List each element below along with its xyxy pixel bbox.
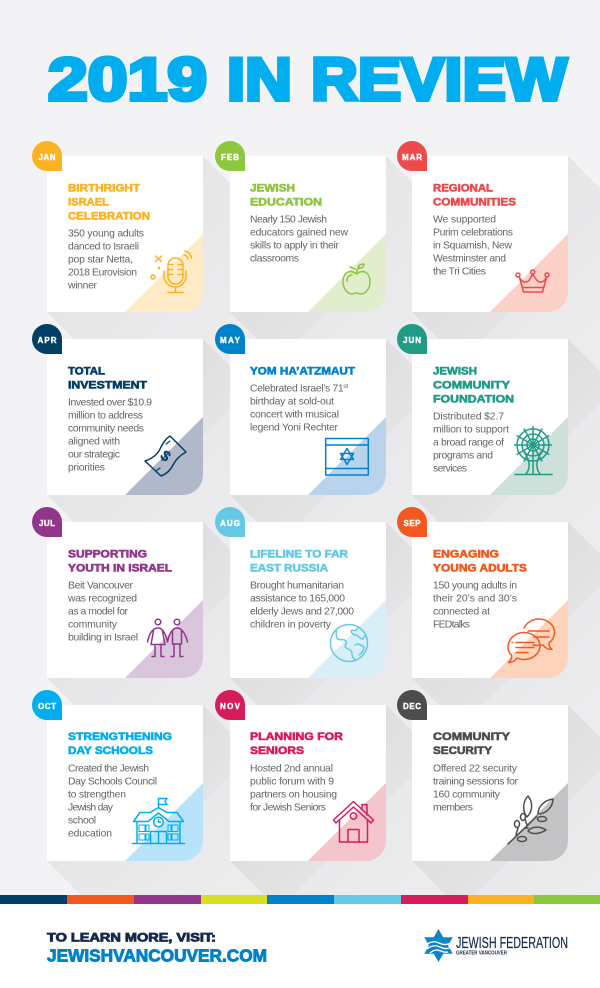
- body text: Day Schools Council: [68, 776, 157, 787]
- colour band: [0, 895, 600, 904]
- body text: winner: [67, 281, 98, 292]
- body text: our strategic: [68, 450, 120, 461]
- icon: Israeli flag: [326, 438, 368, 475]
- body text: Offered 22 security: [433, 763, 518, 774]
- badge: MAY: MAY: [220, 336, 241, 345]
- heading: JEWISH: [433, 365, 477, 377]
- body text: education: [68, 828, 112, 839]
- badge: SEP: [397, 507, 427, 537]
- heading: CELEBRATION: [68, 210, 150, 222]
- logo: Jewish Federation: [424, 929, 568, 962]
- badge: MAR: MAR: [402, 153, 422, 162]
- title: 2019: [48, 46, 207, 113]
- panel: February: [215, 141, 386, 312]
- heading: FOUNDATION: [433, 393, 514, 405]
- icon: microphone: [151, 251, 192, 292]
- badge: APR: [32, 324, 62, 354]
- panel: October: [32, 690, 203, 861]
- badge: DEC: [397, 690, 427, 720]
- icon: speech bubbles: [508, 619, 554, 662]
- badge: JAN: [32, 141, 62, 171]
- heading: COMMUNITY: [433, 379, 511, 391]
- badge: JAN: JAN: [38, 153, 56, 162]
- body text: [433, 580, 517, 630]
- body text: Purim celebrations: [433, 228, 513, 239]
- call to action: JEWISHVANCOUVER.COM: [47, 946, 267, 966]
- badge: FEB: FEB: [221, 153, 239, 162]
- badge: SEP: SEP: [404, 519, 421, 528]
- heading: COMMUNITY: [433, 731, 511, 743]
- icon: apple: [343, 264, 370, 294]
- heading: [250, 182, 322, 208]
- icon: globe: [330, 624, 368, 662]
- body text: [250, 763, 337, 813]
- call to action: [47, 930, 267, 966]
- panel: June: [397, 324, 568, 495]
- body text: 2018 Eurovision: [68, 268, 137, 279]
- body text: programs and: [433, 451, 493, 462]
- heading: [433, 182, 516, 208]
- heading: SENIORS: [250, 745, 304, 757]
- heading: INVESTMENT: [68, 379, 147, 391]
- body text: pop star Netta,: [68, 255, 133, 266]
- body text: million to address: [68, 411, 143, 422]
- body text: We supported: [433, 215, 496, 226]
- icon: olive branch: [508, 796, 553, 844]
- icon: banknote: $: [157, 447, 174, 466]
- body text: birthday at sold-out: [250, 397, 334, 408]
- panel: March: [397, 141, 568, 312]
- heading: JEWISH: [250, 182, 295, 194]
- heading: DAY SCHOOLS: [68, 745, 153, 757]
- call to action: TO LEARN MORE, VISIT:: [47, 930, 216, 944]
- body text: Jewish day: [68, 802, 114, 813]
- body text: 350 young adults: [68, 229, 144, 240]
- heading: SUPPORTING: [68, 548, 147, 560]
- body text: public forum with 9: [250, 776, 334, 787]
- body text: members: [433, 802, 473, 813]
- long card shadows: [47, 156, 600, 988]
- badge: NOV: NOV: [220, 702, 241, 711]
- body text: concert with musical: [250, 410, 339, 421]
- body text: Created the Jewish: [68, 763, 149, 774]
- badge: JUL: [32, 507, 62, 537]
- panel: May: [215, 324, 386, 495]
- heading: [433, 548, 527, 574]
- heading: [250, 548, 348, 574]
- panel: September: [397, 507, 568, 678]
- heading: EAST RUSSIA: [250, 562, 328, 574]
- icon: house: [334, 802, 374, 842]
- icon: school building: [132, 798, 184, 844]
- heading: [433, 365, 514, 405]
- body text: danced to Israeli: [68, 242, 139, 253]
- badge: DEC: DEC: [403, 702, 421, 711]
- body text: was recognized: [67, 593, 137, 604]
- body text: 160 community: [433, 789, 501, 800]
- body text: training sessions for: [433, 776, 519, 787]
- panel: December: [397, 690, 568, 861]
- body text: Celebrated Israel’s 71: [250, 384, 344, 395]
- body text: in Squamish, New: [433, 241, 512, 252]
- heading: LIFELINE TO FAR: [250, 548, 348, 560]
- body text: FEDtalks: [433, 619, 470, 630]
- body text: as a model for: [68, 606, 129, 617]
- badge: APR: APR: [38, 336, 57, 345]
- panel: August: [215, 507, 386, 678]
- panel: July: [32, 507, 203, 678]
- body text: their 20’s and 30’s: [433, 593, 517, 604]
- body text: children in poverty: [250, 619, 332, 630]
- body text: a broad range of: [433, 438, 504, 449]
- heading: STRENGTHENING: [68, 731, 172, 743]
- badge: AUG: AUG: [220, 519, 240, 528]
- body text: partners on housing: [250, 789, 337, 800]
- body text: elderly Jews and 27,000: [250, 606, 354, 617]
- body text: [67, 229, 144, 292]
- heading: [68, 731, 172, 757]
- heading: YOUNG ADULTS: [433, 562, 527, 574]
- body text: services: [433, 464, 467, 475]
- body text: community: [68, 619, 118, 630]
- body text: Distributed $2.7: [433, 412, 504, 423]
- body text: million to support: [433, 425, 509, 436]
- badge: MAR: [397, 141, 427, 171]
- body text: [433, 412, 509, 475]
- icon: banknote: [145, 436, 186, 476]
- heading: SECURITY: [433, 745, 493, 757]
- body text: community needs: [68, 424, 144, 435]
- heading: [68, 182, 150, 222]
- icon: two children: [148, 619, 188, 656]
- body text: the Tri Cities: [433, 267, 486, 278]
- badge: FEB: [215, 141, 245, 171]
- body text: [68, 398, 152, 474]
- heading: TOTAL: [68, 365, 105, 377]
- panel: April: [32, 324, 203, 495]
- heading: [68, 365, 147, 391]
- panel: January: [32, 141, 203, 312]
- icon: tree: [513, 425, 553, 474]
- body text: aligned with: [68, 437, 120, 448]
- body text: [250, 215, 348, 265]
- badge: AUG: [215, 507, 245, 537]
- body text: Beit Vancouver: [68, 580, 134, 591]
- heading: COMMUNITIES: [433, 196, 516, 208]
- body text: [433, 215, 513, 278]
- heading: PLANNING FOR: [250, 731, 343, 743]
- heading: YOUTH IN ISRAEL: [68, 562, 172, 574]
- body text: Invested over $10.9: [68, 398, 152, 409]
- body text: connected at: [433, 606, 490, 617]
- body text: to strengthen: [68, 789, 126, 800]
- icon: crown: [516, 270, 549, 292]
- title: IN: [227, 46, 292, 113]
- logo: Jewish Federation: GREATER VANCOUVER: [456, 950, 507, 956]
- panel: November: [215, 690, 386, 861]
- heading: YOM HA’ATZMAUT: [250, 365, 355, 377]
- title: [48, 46, 567, 113]
- body text: [250, 580, 354, 630]
- badge: JUN: [397, 324, 427, 354]
- heading: EDUCATION: [250, 196, 322, 208]
- heading: ENGAGING: [433, 548, 499, 560]
- body text: [250, 383, 348, 434]
- title: REVIEW: [311, 46, 567, 113]
- body text: [67, 580, 138, 643]
- heading: [250, 731, 343, 757]
- body text: for Jewish Seniors: [250, 802, 326, 813]
- heading: [68, 548, 172, 574]
- body text: educators gained new: [250, 228, 348, 239]
- heading: REGIONAL: [433, 182, 493, 194]
- heading: ISRAEL: [68, 196, 109, 208]
- badge: OCT: [32, 690, 62, 720]
- body text: skills to apply in their: [250, 241, 340, 252]
- heading: [433, 731, 511, 757]
- heading: BIRTHRIGHT: [68, 182, 140, 194]
- body text: classrooms: [250, 254, 299, 265]
- body text: school: [68, 815, 96, 826]
- footer panel: [0, 904, 600, 988]
- body text: priorities: [68, 463, 105, 474]
- body text: st: [343, 383, 348, 390]
- body text: Hosted 2nd annual: [250, 763, 333, 774]
- body text: [68, 763, 157, 839]
- body text: Westminster and: [433, 254, 506, 265]
- body text: 150 young adults in: [433, 580, 517, 591]
- body text: legend Yoni Rechter: [250, 423, 339, 434]
- badge: JUN: JUN: [403, 336, 421, 345]
- body text: Brought humanitarian: [250, 580, 344, 591]
- badge: MAY: [215, 324, 245, 354]
- badge: OCT: OCT: [38, 702, 56, 711]
- badge: JUL: JUL: [39, 519, 55, 528]
- badge: NOV: [215, 690, 245, 720]
- body text: Nearly 150 Jewish: [250, 215, 327, 226]
- body text: assistance to 165,000: [250, 593, 345, 604]
- body text: building in Israel: [68, 632, 138, 643]
- body text: [433, 763, 519, 813]
